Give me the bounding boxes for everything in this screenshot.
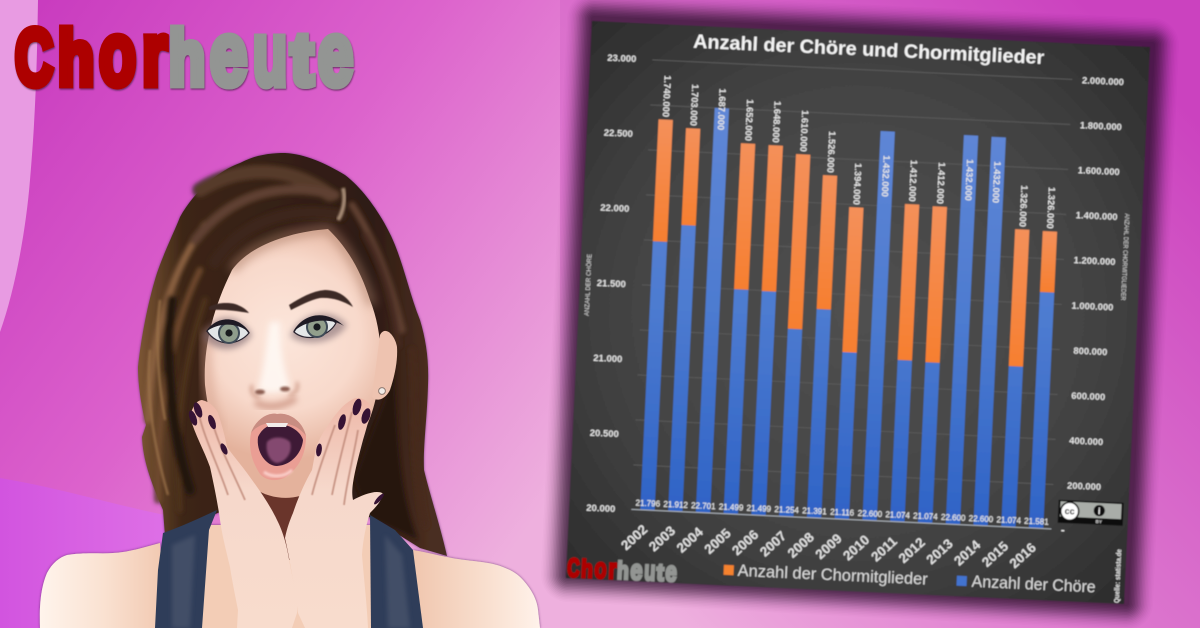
chart panel [566,21,1150,609]
nose [251,322,298,406]
woman: surprised face with hands on cheeks [40,153,540,628]
choir value labels [635,499,1049,527]
member value labels: 1.740.000 [661,75,674,117]
open mouth [250,414,306,480]
member value labels: 1.412.000 [935,162,948,204]
nails right [315,398,385,506]
year labels: 2011 [868,533,900,564]
nails left [187,401,229,456]
right axis labels: 600.000 [1071,390,1106,402]
right axis labels: 400.000 [1069,435,1103,447]
member value labels: 1.412.000 [907,160,920,202]
choir value labels: 21.254 [774,505,800,515]
neck [230,470,330,560]
member value labels: 1.394.000 [851,163,864,205]
choir value labels: 22.600 [857,509,883,519]
right axis labels [1063,74,1124,492]
small logo: e [665,556,678,589]
member value labels: 1.687.000 [716,88,729,131]
logo: Chorheute: e [210,4,247,104]
small logo: e [630,554,643,587]
left axis title: ANZAHL DER CHÖRE [583,254,594,316]
source note: Quelle: statista.de [1114,549,1124,603]
year labels: 2002 [618,522,650,553]
stacked bars [640,105,1062,528]
hair [138,153,447,556]
choir value labels: 21.116 [830,508,855,518]
chart panel shadow [568,19,1152,603]
logo: Chorheute: r [142,4,167,104]
legend [723,561,1096,597]
member value labels: 1.432.000 [880,155,892,197]
left axis labels: 20.000 [586,503,616,515]
member value labels: 1.526.000 [825,131,838,173]
face [203,229,397,498]
year labels: 2004 [674,524,706,556]
eyebrows [209,290,353,313]
choir value labels: 22.600 [968,514,994,524]
left axis labels: 23.000 [607,53,637,65]
choir value labels: 21.074 [913,512,938,522]
logo: Chorheute: e [318,4,353,104]
member value labels: 1.648.000 [771,101,784,143]
right axis labels: 200.000 [1067,480,1101,492]
year labels: 2014 [951,537,984,569]
left hand [187,400,297,628]
left axis labels: 21.000 [593,353,623,365]
year labels: 2012 [896,535,928,566]
member value labels: 1.610.000 [798,110,811,152]
logo: Chorheute: h [169,16,205,102]
logo: Chorheute: o [99,4,136,104]
CC BY licence badge [1057,500,1124,534]
choir value labels: 21.499 [746,504,772,514]
year labels: 2007 [757,528,789,560]
year labels: 2013 [923,536,956,567]
choir value labels: 22.600 [941,513,966,523]
year labels [618,520,1040,572]
right hand [285,398,385,628]
logo: Chorheute: C [15,12,53,102]
right axis title: ANZAHL DER CHORMITGLIEDER [1119,213,1130,301]
small logo [567,551,678,589]
choir value labels: 21.912 [663,500,689,510]
tank top straps [155,510,423,628]
member value labels [656,75,1062,229]
left axis labels: 21.500 [597,278,626,290]
year labels: 2016 [1007,540,1039,571]
left axis labels: 20.500 [590,428,619,440]
member value labels: 1.326.000 [1045,187,1058,229]
left eye [203,318,252,349]
small logo: o [594,553,607,585]
small logo: h [617,557,630,585]
choir value labels: 21.581 [1024,517,1049,527]
choir value labels: 21.074 [885,510,911,520]
small logo: r [608,553,617,586]
shoulders and chest [40,525,540,628]
ear and earring [372,331,397,400]
member value labels: 1.432.000 [963,159,976,201]
year labels: 2015 [979,538,1012,570]
CC BY licence badge: i [1098,506,1101,516]
year labels: 2009 [812,531,845,562]
small logo: t [656,561,665,587]
logo: Chorheute [15,4,353,104]
choir value labels: 21.796 [635,499,661,509]
logo: Chorheute: h [58,16,94,102]
right axis labels: 1.600.000 [1078,164,1120,177]
right axis labels: 1.200.000 [1073,254,1116,267]
member value labels: 1.326.000 [1017,185,1030,227]
legend: Anzahl der Chormitglieder [737,562,929,589]
small logo: C [567,554,580,583]
left axis labels: 22.000 [600,203,630,215]
choir value labels: 21.499 [719,502,744,513]
right axis labels: 1.000.000 [1071,299,1114,312]
member value labels: 1.432.000 [990,161,1003,203]
right axis labels: 800.000 [1073,345,1108,357]
CC BY licence badge: cc [1064,506,1075,517]
right axis labels: 1.800.000 [1080,119,1122,132]
left axis labels: 22.500 [604,128,633,140]
year labels: 2010 [840,532,872,563]
left axis labels [586,53,637,515]
year labels: 2008 [785,529,817,561]
right axis labels: 2.000.000 [1082,74,1124,87]
logo: Chorheute: t [291,20,313,100]
choir value labels: 21.391 [802,506,827,517]
chart title: Anzahl der Chöre und Chormitglieder [693,32,1045,69]
legend: Anzahl der Chöre [971,573,1096,597]
small logo: u [644,555,656,588]
member value labels: 1.703.000 [688,84,701,126]
right eye [290,314,347,343]
CC BY licence badge: BY [1095,519,1102,524]
choir value labels: 21.074 [996,515,1022,526]
logo: Chorheute: u [253,4,287,104]
small logo: h [581,555,594,584]
member value labels: 1.652.000 [743,99,756,141]
year labels: 2003 [646,523,679,554]
year labels: 2006 [729,527,762,558]
year labels: 2005 [701,525,734,557]
right axis labels: 1.400.000 [1076,209,1118,222]
choir value labels: 22.701 [691,501,716,511]
